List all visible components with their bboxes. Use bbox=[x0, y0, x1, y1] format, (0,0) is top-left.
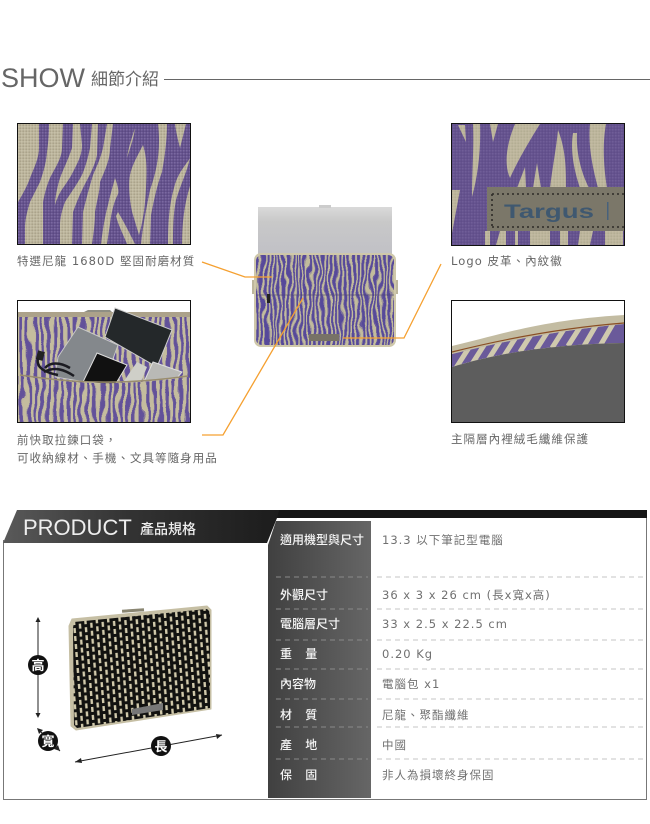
device: black tablet bbox=[105, 308, 172, 367]
caption: logo: Logo 皮革、內紋徽 bbox=[451, 254, 563, 268]
spec values: 0.20 Kg bbox=[382, 647, 433, 661]
spec values: 33 x 2.5 x 22.5 cm bbox=[382, 617, 508, 631]
spec labels: 內容物 bbox=[280, 676, 316, 691]
spec labels: 電腦層尺寸 bbox=[280, 616, 340, 631]
device: silver drive bbox=[55, 327, 118, 383]
spec labels bbox=[280, 532, 364, 782]
device: cable bbox=[36, 350, 74, 376]
spec labels: 保 固 bbox=[280, 768, 318, 782]
product image: sleeve with dimensions bbox=[28, 606, 222, 763]
spec labels: 適用機型與尺寸 bbox=[280, 532, 364, 547]
spec values: 非人為損壞終身保固 bbox=[382, 768, 494, 782]
heading: SHOW: SHOW bbox=[1, 63, 86, 93]
dimension: length: 長 bbox=[154, 739, 168, 754]
spec labels: 產 地 bbox=[280, 737, 318, 752]
spec labels: 外觀尺寸 bbox=[280, 587, 328, 602]
photo: leather logo bbox=[452, 124, 624, 246]
device: camera bbox=[143, 362, 182, 384]
caption: pocket: 可收納線材、手機、文具等隨身用品 bbox=[17, 451, 218, 465]
header bar: PRODUCT: PRODUCT bbox=[23, 515, 132, 540]
photo: plush lining bbox=[452, 300, 624, 422]
panel: product spec frame bbox=[4, 515, 646, 800]
spec values: 36 x 3 x 26 cm (長x寬x高) bbox=[382, 588, 551, 602]
photo: fabric close-up bbox=[18, 124, 190, 244]
caption: pocket bbox=[17, 433, 218, 465]
header bar: PRODUCT bbox=[3, 510, 647, 543]
heading: SHOW: 細節介紹 bbox=[91, 70, 159, 89]
spec values: 尼龍、聚酯纖維 bbox=[382, 708, 470, 722]
dimension: height: 高 bbox=[31, 658, 45, 673]
leather badge bbox=[487, 187, 624, 231]
caption: lining: 主隔層內裡絨毛纖維保護 bbox=[451, 432, 589, 446]
spec table column bbox=[268, 521, 371, 798]
device: phone bbox=[83, 353, 127, 385]
spec values: 13.3 以下筆記型電腦 bbox=[382, 533, 504, 547]
center product: sleeve with laptop bbox=[252, 205, 398, 347]
leather badge: Targus bbox=[504, 202, 594, 223]
heading: SHOW bbox=[1, 63, 650, 93]
spec values bbox=[382, 533, 551, 782]
spec labels: 材 質 bbox=[280, 707, 318, 722]
spec labels: 重 量 bbox=[280, 646, 318, 661]
spec values: 電腦包 x1 bbox=[382, 677, 440, 691]
sleeve bbox=[69, 606, 211, 730]
dimension: length bbox=[75, 734, 222, 763]
dimension: width bbox=[37, 728, 60, 751]
header bar: PRODUCT: 產品規格 bbox=[140, 521, 196, 537]
dimension: width: 寬 bbox=[41, 734, 55, 749]
spec row dividers bbox=[276, 577, 643, 759]
caption: pocket: 前快取拉鍊口袋， bbox=[17, 433, 117, 447]
caption: fabric: 特選尼龍 1680D 堅固耐磨材質 bbox=[17, 254, 195, 268]
dimension: height bbox=[28, 617, 48, 718]
photo: front pocket with devices bbox=[17, 300, 191, 423]
spec values: 中國 bbox=[382, 738, 407, 752]
leader line: logo bbox=[343, 264, 441, 338]
leader line: pocket bbox=[202, 298, 303, 435]
leader line: fabric bbox=[202, 262, 272, 277]
device: charger bbox=[122, 362, 147, 384]
